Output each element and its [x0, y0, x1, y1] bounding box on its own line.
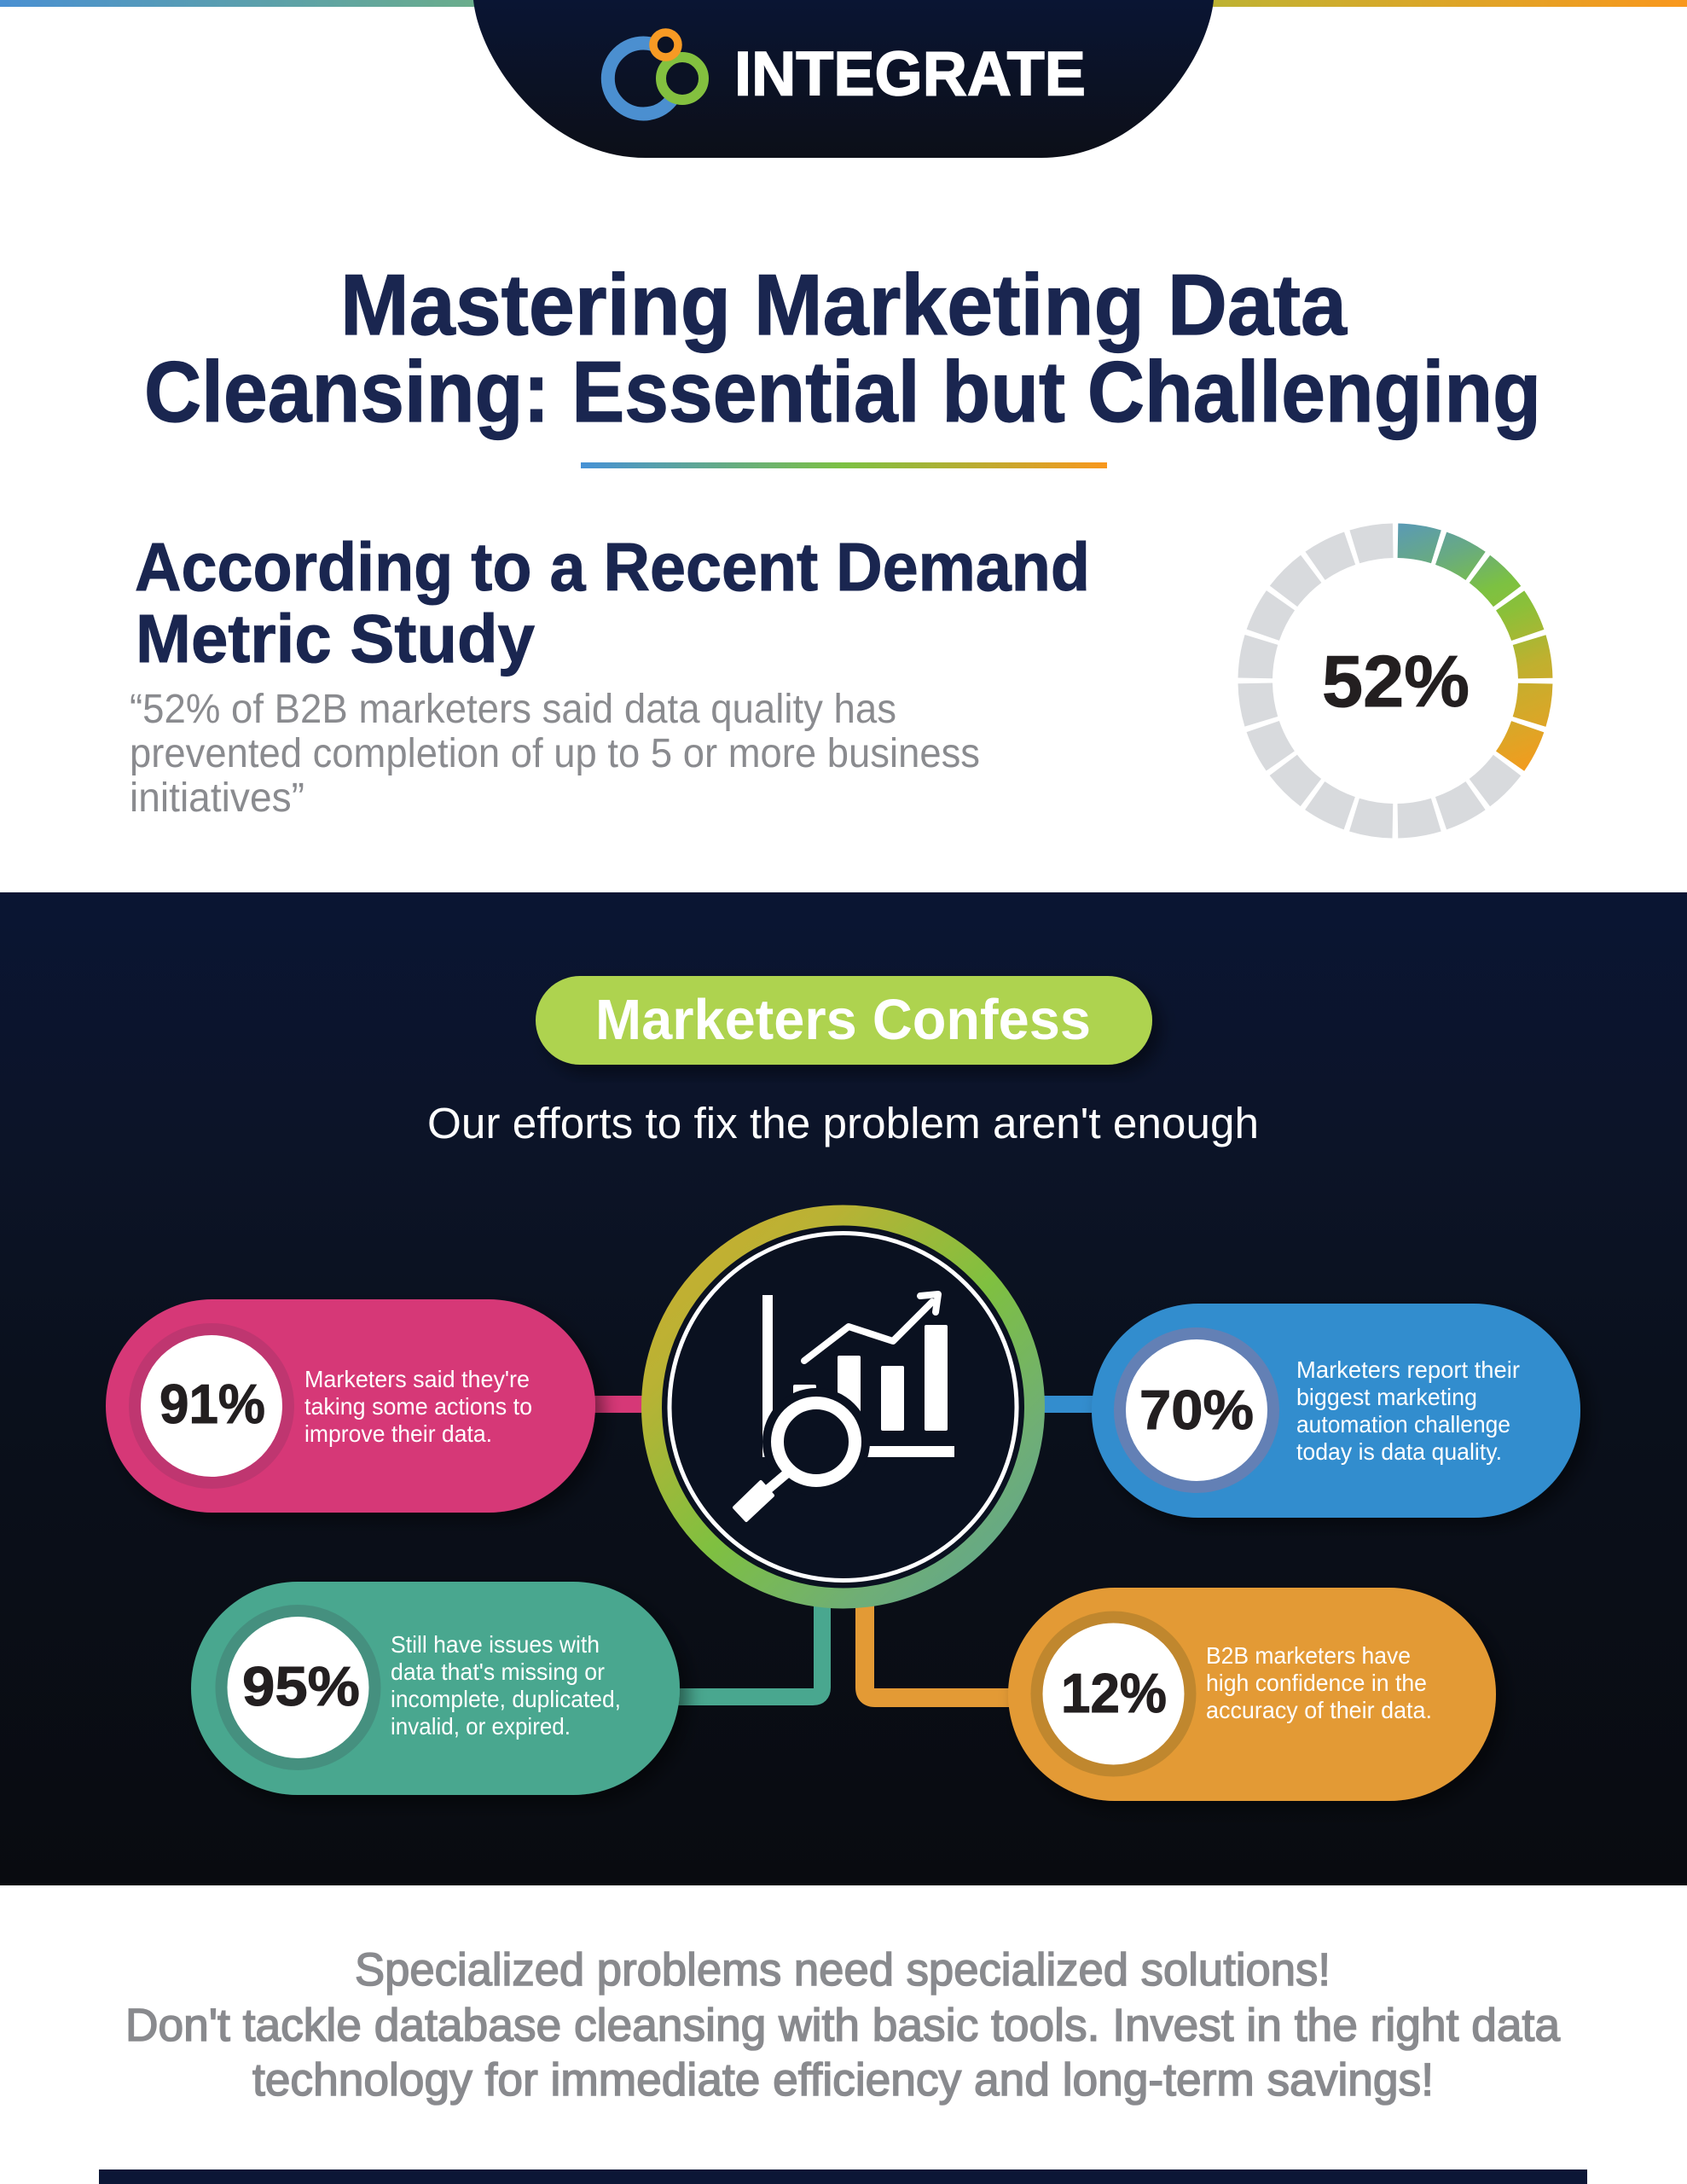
stat description: data that's missing or: [391, 1658, 605, 1685]
study quote: initiatives”: [130, 775, 304, 821]
connector: orange: [865, 1602, 1015, 1698]
study quote: prevented completion of up to 5 or more business: [130, 731, 980, 776]
stat value: 91%: [159, 1373, 265, 1435]
study quote: “52% of B2B marketers said data quality has: [130, 687, 896, 732]
study quote: [130, 687, 980, 821]
stat description: Still have issues with: [391, 1631, 600, 1658]
stat value: 95%: [242, 1655, 360, 1717]
top gradient strip: [0, 0, 1687, 7]
section heading pill: Marketers Confess: [595, 988, 1091, 1052]
stat description: Marketers report their: [1296, 1356, 1520, 1383]
connector: pink: [588, 1396, 645, 1413]
stat card: 95%: [191, 1582, 680, 1795]
title: Cleansing: Essential but Challenging: [144, 345, 1541, 440]
stat description: [1296, 1356, 1520, 1465]
stat description: high confidence in the: [1206, 1670, 1427, 1696]
stat description: [1206, 1642, 1432, 1723]
study heading: Metric Study: [136, 601, 535, 677]
donut gauge 52%: [1255, 541, 1535, 821]
stat description: [391, 1631, 621, 1740]
stat description: B2B marketers have: [1206, 1642, 1411, 1669]
stat description: today is data quality.: [1296, 1438, 1502, 1465]
bottom bar: [99, 2169, 1587, 2184]
section heading pill: [536, 976, 1152, 1065]
stat description: incomplete, duplicated,: [391, 1686, 621, 1712]
connector: teal: [674, 1602, 822, 1697]
study heading: [135, 529, 1090, 677]
closing message: [125, 1944, 1561, 2106]
stat card: 91%: [106, 1299, 595, 1513]
icon: chart with magnifier: [734, 1294, 954, 1520]
connector: blue: [1042, 1396, 1095, 1413]
stat description: biggest marketing: [1296, 1384, 1477, 1410]
stat description: automation challenge: [1296, 1411, 1510, 1438]
section subheading: Our efforts to fix the problem aren't enough: [427, 1099, 1259, 1147]
center circle with analytics icon: [641, 1205, 1044, 1608]
study heading: According to a Recent Demand: [135, 529, 1090, 605]
title underline: [581, 462, 1107, 468]
stat description: invalid, or expired.: [391, 1713, 571, 1740]
stat description: [304, 1366, 532, 1447]
stat value: 12%: [1061, 1662, 1167, 1724]
title: Mastering Marketing Data: [340, 258, 1348, 353]
stat description: Marketers said they're: [304, 1366, 530, 1392]
closing message: technology for immediate efficiency and long-term savings!: [252, 2054, 1434, 2106]
gauge value: 52%: [1322, 642, 1470, 723]
icon: integrate logo rings: [608, 32, 704, 114]
panel: marketers confess: [0, 892, 1687, 1885]
closing message: Specialized problems need specialized solutions!: [355, 1944, 1330, 1995]
title: [144, 258, 1541, 440]
closing message: Don't tackle database cleansing with basic tools. Invest in the right data: [125, 2000, 1561, 2051]
logo wordmark: INTEGRATE: [734, 39, 1086, 109]
header logo tab: [473, 0, 1214, 158]
stat value: 70%: [1139, 1379, 1254, 1441]
stat description: improve their data.: [304, 1420, 492, 1447]
stat description: taking some actions to: [304, 1393, 532, 1420]
stat card: 12%: [1008, 1588, 1496, 1801]
stat card: 70%: [1092, 1304, 1580, 1518]
stat description: accuracy of their data.: [1206, 1697, 1432, 1723]
